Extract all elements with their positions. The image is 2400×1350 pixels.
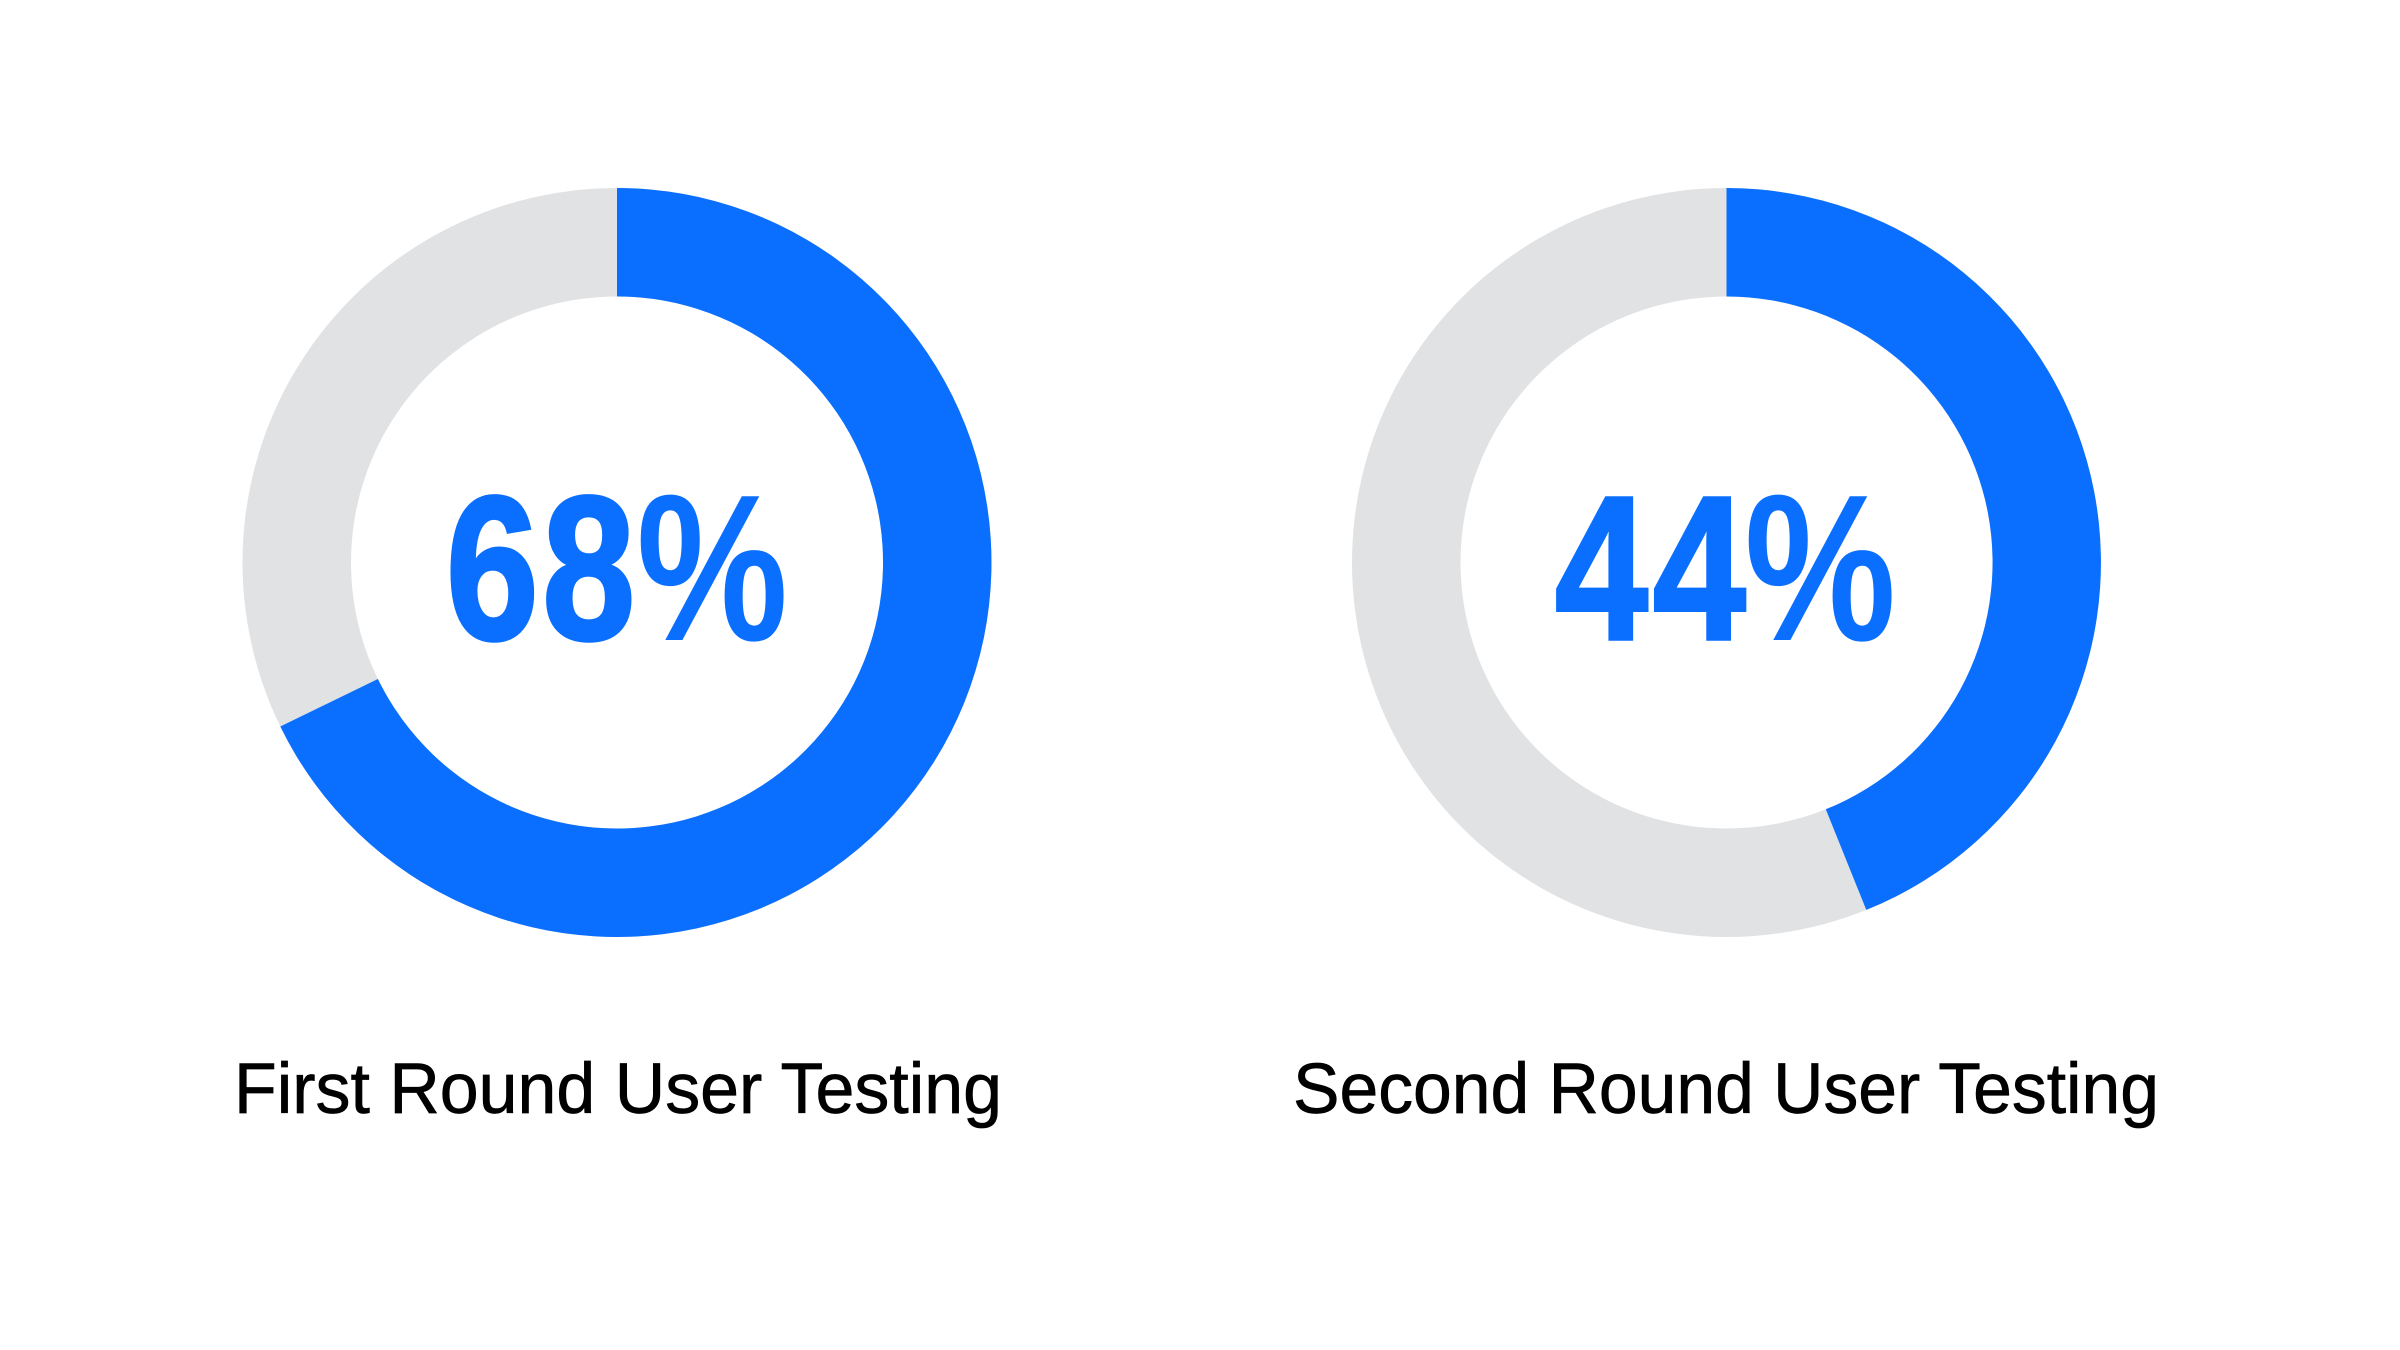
label: first round: First Round User Testing xyxy=(234,1050,1002,1129)
donut chart: first round, 68% xyxy=(242,188,991,937)
value: 44%: 44 xyxy=(1555,454,1746,683)
value: 68%: 68 xyxy=(446,454,635,683)
panel: second round user testing xyxy=(1293,188,2159,1129)
value: 68%: % xyxy=(636,451,788,685)
value: 44%: % xyxy=(1744,451,1896,685)
donut chart: second round, 44% xyxy=(1352,188,2101,937)
label: second round: Second Round User Testing xyxy=(1293,1050,2159,1129)
panel: first round user testing xyxy=(234,188,1002,1129)
